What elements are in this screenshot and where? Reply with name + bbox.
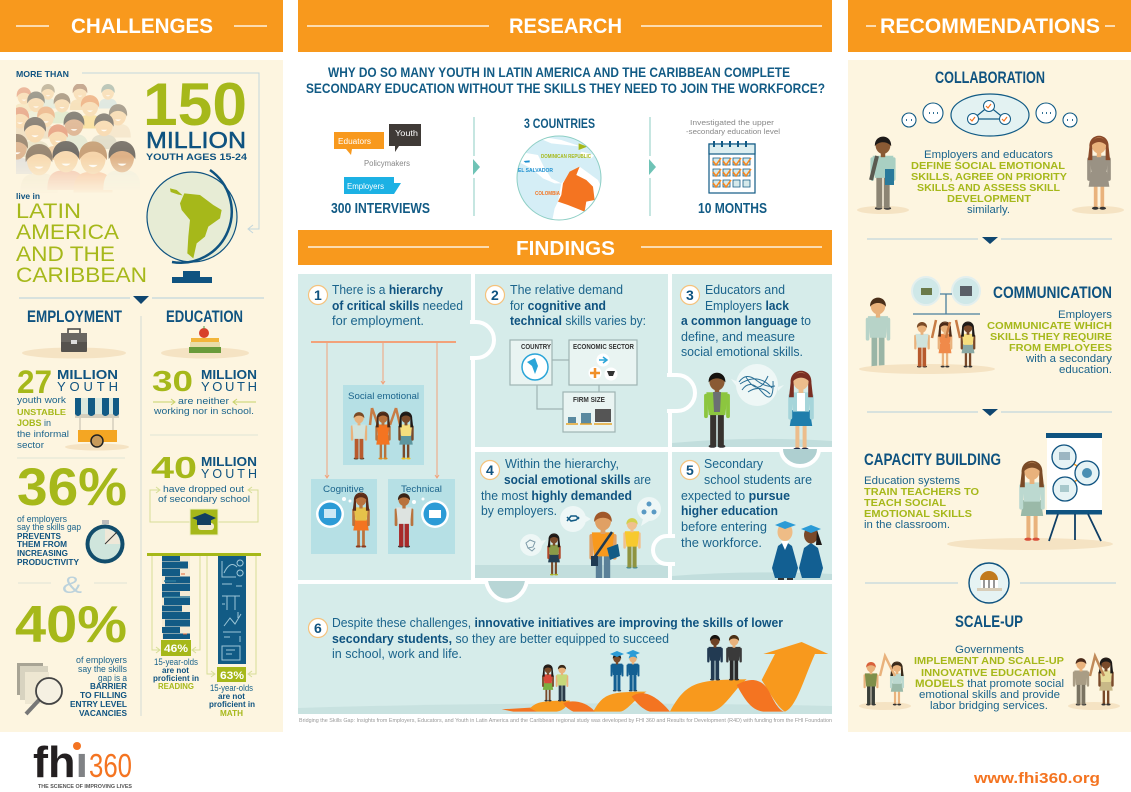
header: research: RESEARCH [509,15,622,38]
stat: 40 million youth: of secondary school [158,494,250,505]
finding 2 background [475,274,668,447]
logo: fhi 360: fhı [33,738,88,787]
finding 6 text: Despite these challenges, innovative initiatives are improving the skills of lower [332,616,783,630]
three countries map [516,118,602,220]
finding 6 text: in school, work and life. [332,647,462,661]
floor [672,439,832,447]
label: 63 percent: 63% [220,670,244,682]
capacity building text: TEACH SOCIAL [864,498,946,509]
figure: educator woman [1072,136,1124,214]
group: three youth [859,320,995,374]
communication text: education. [1059,364,1112,376]
stat: 27 million youth: the informal [17,429,69,440]
finding 6 text [332,616,783,661]
stat: 40 percent: gap is a [98,673,127,683]
heading: employment: EMPLOYMENT [27,307,122,326]
panel: finding 5 [672,452,832,580]
stat: 30 million youth: YOUTH [201,379,257,394]
floor [672,572,832,580]
finding 5 text: school students are [704,473,812,487]
separator arrow one [473,117,480,216]
divider with capitol icon [865,563,1116,603]
communication text: COMMUNICATE WHICH [987,321,1112,332]
thought bubbles with icons [520,497,661,556]
scale-up text: INNOVATIVE EDUCATION [921,668,1056,679]
three countries map: COLOMBIA [535,191,560,197]
stat: 40 percent: VACANCIES [79,709,128,718]
finding 3 background [672,274,832,447]
stat: 40 million youth: 40 [151,450,197,485]
stat: 150 million: YOUTH AGES 15-24 [146,152,248,163]
header: findings: FINDINGS [516,238,615,260]
capacity building text: EMOTIONAL SKILLS [864,509,972,520]
three countries map: EL SALVADOR [518,168,553,174]
stat: 36 percent: THEM FROM [17,540,67,549]
chart: reading and math proficiency bars [147,553,261,718]
arrow: down to employment and education [133,296,149,304]
bubble: youth: Youth [395,129,418,138]
finding 5 text: Secondary [704,457,764,471]
finding 1 text: There is a hierarchy [332,283,443,297]
stat: 30 million youth: working nor in school. [153,406,254,416]
header: challenges [0,0,283,52]
ten months calendar: -secondary education level [686,127,780,136]
finding 2 text: for cognitive and [510,299,606,313]
panel: finding 3 [672,274,832,451]
capacity building text: TRAIN TEACHERS TO [864,487,979,498]
separator arrow two [649,117,656,216]
finding 3 text: define, and measure [681,330,795,344]
number 2: 2 [491,287,499,303]
three countries map: 3 COUNTRIES [524,115,595,131]
stat: 40 percent: ENTRY LEVEL [70,700,127,709]
figures: student and teacher [859,656,911,710]
speech dots [902,103,1077,127]
diagram: country, sector, firm size [510,340,637,432]
text: live in latin america: CARIBBEAN [16,263,147,287]
crowd illustration [16,84,136,191]
hierarchy connectors [311,341,456,343]
panel: finding 6 [298,584,832,714]
finding 2 text: technical skills varies by: [510,314,646,328]
logo: fhi 360: THE SCIENCE OF IMPROVING LIVES [38,784,132,790]
scale-up text: emotional skills and provide [919,689,1060,701]
number 6: 6 [314,620,322,636]
communication text: SKILLS THEY REQUIRE [990,332,1112,343]
stat: 27 million youth: youth work [17,395,66,406]
arrow: to capacity building [982,409,998,416]
caption: reading: proficient in [153,673,199,683]
stat: 40 percent [15,596,128,718]
label: 63 percent [217,667,246,682]
capacity building text: in the classroom. [864,519,950,531]
stat: 36 percent: say the skills gap [17,522,81,532]
heading: collaboration: COLLABORATION [935,69,1045,87]
finding 4 text: Within the hierarchy, [505,457,619,471]
number 4 [480,460,500,480]
communication text: FROM EMPLOYEES [1009,343,1112,354]
finding 5 text: higher education [681,504,778,518]
stat: 36 percent: PREVENTS [17,532,62,541]
more than label with leader line [16,69,259,233]
icon: stopwatch [86,520,124,564]
icon: street vendor cart [65,398,129,450]
ten months calendar: 10 MONTHS [698,200,767,217]
recommendations background [848,60,1131,732]
stat: 36 percent [17,458,127,567]
bar: math chalkboard [218,556,246,664]
finding 5 background [672,452,832,580]
icon: graduation cap [190,509,218,535]
panel: recommendations [848,0,1131,732]
ten months calendar [686,118,780,217]
header: recommendations [848,0,1131,52]
stat: 30 million youth: are neither [178,396,229,406]
stat: 27 million youth: YOUTH [57,379,118,394]
panel: finding 4 [475,452,668,591]
stat: 30 million youth [152,366,257,416]
figures: youth [547,512,641,578]
caption: reading: are not [162,665,189,675]
stat: 40 percent: of employers [76,655,127,665]
box: cognitive [311,479,377,554]
text: live in latin america: live in [16,192,40,201]
finding 4 background [475,452,668,578]
icon: education and employment scales [912,277,980,314]
figure: employer man [857,137,909,214]
box: social emotional [343,385,424,465]
finding 5 text: the workforce. [681,536,762,550]
panel: finding 1 [298,274,471,580]
finding 6 background [298,584,832,714]
finding 2 text: The relative demand [510,283,623,297]
research question: SECONDARY EDUCATION WITHOUT THE SKILLS THEY NEED TO JOIN THE WORKFORCE? [306,80,825,96]
text: live in latin america [16,192,147,287]
stat: 36 percent: 36% [17,458,127,517]
stat: 40 percent: 40% [15,596,127,654]
communication text: Employers [1058,309,1113,321]
interviews: speech bubbles [331,124,430,217]
capacity building text: Education systems [864,475,961,487]
stat: 40 percent: BARRIER [90,682,127,691]
finding 3 text: social emotional skills. [681,345,803,359]
finding 5 text [681,457,812,550]
stat: 40 million youth: MILLION [201,455,257,469]
collaboration text: Employers and educators [924,149,1054,161]
scale-up text: labor bridging services. [930,700,1048,712]
stat: 40 million youth [150,450,258,522]
figure: employer woman [788,371,814,451]
finding 4 text [481,457,651,518]
collaboration text: similarly. [967,204,1010,216]
stat: 27 million youth: MILLION [57,367,118,382]
scale-up text: Governments [955,644,1025,656]
figure: boy in yellow [623,518,641,569]
finding 3 text: a common language to [681,314,811,328]
figure: graduate man [772,521,798,580]
caption: math: proficient in [209,699,255,709]
arrow: to communication [982,237,998,244]
collaboration text [911,149,1067,216]
finding 4 text: the most highly demanded [481,489,632,503]
source credit: Bridging the Skills Gap: Insights from Employers, Educators, and Youth in Latin America and the Caribbean regional study was developed by FHI 360 and Results for Development (R4D) with funding from the FHI Foundation [299,718,832,724]
stat: 40 percent: TO FILLING [80,691,127,700]
challenges background [0,60,283,732]
label: 46 percent [161,640,191,656]
finding 5 text: before entering [681,520,767,534]
caption: reading [153,657,199,691]
shadow under teacher [947,538,1113,550]
finding 1 text [332,283,463,328]
number 4: 4 [486,462,494,478]
more than label with leader line: MORE THAN [16,69,69,79]
communication text [987,309,1113,376]
finding 4 text: social emotional skills are [504,473,651,487]
label: economic sector: ECONOMIC SECTOR [573,342,634,351]
icon: teaching flipchart [1046,433,1102,541]
icon: books and apple [161,326,249,358]
bubble: educators: Eduators [338,137,371,146]
label: 46 percent: 46% [164,643,188,655]
figure: educator man [704,373,730,448]
stat: 27 million youth [17,364,118,451]
stat: 27 million youth: 27 [17,364,52,400]
box: technical [388,479,455,554]
panel: challenges [0,0,283,732]
stat: 30 million youth: 30 [152,366,193,398]
finding 2 text [510,283,646,328]
number 1 [308,286,328,304]
scale-up text: MODELS that promote social [915,678,1064,690]
collaboration text: SKILLS AND ASSESS SKILL [917,183,1060,194]
stat: 40 million youth: have dropped out [163,484,244,495]
finding 3 text: Employers lack [705,299,789,313]
number 3 [680,286,700,304]
icon: briefcase [22,329,126,358]
scale-up text: IMPLEMENT AND SCALE-UP [914,656,1064,667]
box: social emotional: Social emotional [348,391,419,402]
text: live in latin america: AND THE [16,242,115,266]
label: firm size [566,395,612,424]
figure: girl [547,533,561,575]
chart: rising ribbon arrow [502,642,828,712]
finding 1 background [298,274,471,580]
label: economic sector [573,342,634,380]
ampersand [18,572,127,599]
number 2 [486,286,504,304]
puzzle tabs [470,322,819,601]
figure: communicating employer [866,298,890,369]
label: country [521,342,551,380]
figures: young professionals [707,635,742,680]
caption: math: 15-year-olds [210,683,253,693]
header: research [298,0,832,52]
website: www.fhi360.org [973,770,1100,787]
stat: 27 million youth: sector [17,440,44,451]
stat: 27 million youth: JOBS in [17,418,51,429]
finding 1 text: of critical skills needed [332,299,463,313]
text: live in latin america: LATIN [16,199,81,223]
figure: graduate woman [799,525,823,578]
research question [306,64,825,96]
figure: boy with bag [589,512,620,578]
stat: 36 percent: INCREASING [17,549,68,558]
three countries map: DOMINICAN REPUBLIC [541,154,591,160]
icon: globe [147,170,237,283]
finding 3 text [681,283,811,359]
number 1: 1 [314,287,322,303]
floor [475,565,668,578]
logo: fhi 360 [33,738,132,790]
scale-up text [914,644,1064,712]
icon: collaboration ellipse [951,94,1029,136]
capacity building text [864,475,979,531]
label: firm size: FIRM SIZE [573,395,605,404]
icon: magnifier over papers [17,663,62,714]
text: live in latin america: AMERICA [16,220,120,244]
figure: teacher [1019,461,1045,541]
floor [298,703,832,714]
stat: 36 percent: of employers [17,514,67,524]
header: findings [298,230,832,265]
box: technical: Technical [401,484,442,495]
finding 1 text: for employment. [332,314,424,328]
label: country: COUNTRY [521,342,551,351]
finding 4 text: by employers. [481,504,557,518]
collaboration text: SKILLS, AGREE ON PRIORITY [911,172,1067,183]
collaboration text: DEVELOPMENT [947,194,1031,205]
stat: 150 million: 150 [143,71,247,138]
caption: math [209,683,255,718]
ten months calendar: Investigated the upper [690,118,775,127]
stat: 40 million youth: YOUTH [201,467,257,481]
figures: school children [542,664,568,701]
header: recommendations: RECOMMENDATIONS [880,15,1100,38]
stat: 27 million youth: UNSTABLE [17,407,66,417]
communication text: with a secondary [1025,353,1113,365]
collaboration text: DEFINE SOCIAL EMOTIONAL [911,161,1065,172]
finding 5 text: expected to pursue [681,489,790,503]
panel: finding 2 [475,274,668,447]
caption: reading: 15-year-olds [154,657,198,667]
bar: reading books [162,556,190,639]
ampersand: & [62,572,82,599]
stat: 30 million youth: MILLION [201,367,257,382]
stat: 150 million [143,71,248,163]
number 5: 5 [686,462,694,478]
research question: WHY DO SO MANY YOUTH IN LATIN AMERICA AND THE CARIBBEAN COMPLETE [328,64,790,80]
number 6 [308,618,328,638]
stat: 150 million: MILLION [146,127,246,153]
logo: fhi 360: 360 [89,747,132,784]
finding 6 text: secondary students, so they are better equipped to succeed [332,632,669,646]
stat: 40 percent: say the skills [78,664,127,674]
number 3: 3 [686,287,694,303]
stat: 36 percent: PRODUCTIVITY [17,558,80,567]
icon: tangled speech bubble [731,364,784,406]
figures: graduates [610,650,640,691]
box: cognitive: Cognitive [323,484,364,495]
bubble: employers: Employers [347,182,384,191]
number 5 [680,460,700,480]
label: 300 interviews: 300 INTERVIEWS [331,200,430,217]
header: challenges: CHALLENGES [71,15,213,38]
heading: scale-up: SCALE-UP [955,613,1023,631]
label: policymakers: Policymakers [364,159,410,168]
heading: education: EDUCATION [166,307,243,326]
figures: official and student [1068,656,1120,710]
caption: math: are not [218,691,245,701]
finding 3 text: Educators and [705,283,785,297]
caption: reading: READING [158,682,194,691]
heading: capacity building: CAPACITY BUILDING [864,451,1001,469]
caption: math: MATH [220,709,243,718]
